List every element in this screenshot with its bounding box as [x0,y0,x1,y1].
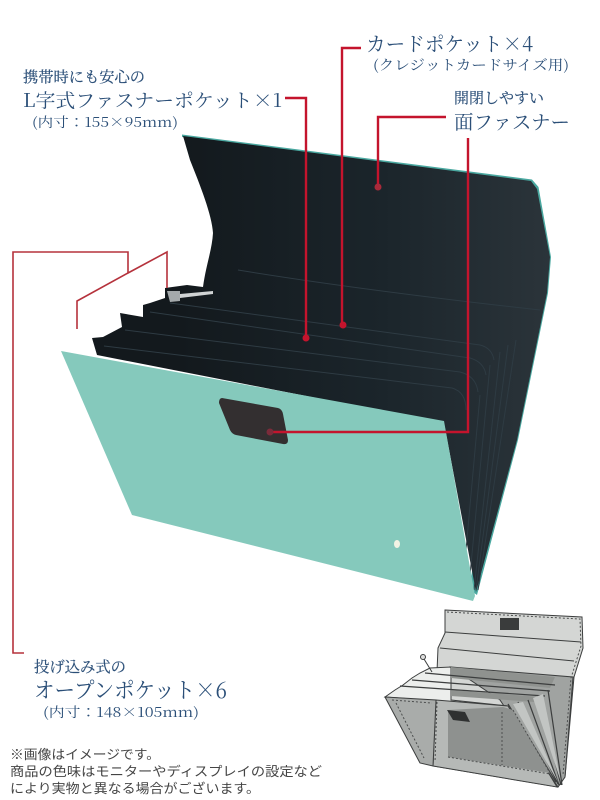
label: card pocket [366,28,569,75]
speck [394,540,400,548]
label: open pockets: オープンポケット×6 [34,674,227,705]
leader: L-shape fastener pocket [285,98,310,342]
label: open pockets: 投げ込み式の [34,656,126,677]
diagram pocket bands [451,667,555,702]
label: L-shape fastener pocket: L字式ファスナーポケット×1 [23,86,282,113]
note: image disclaimer: により実物と異なる場合がございます。 [10,778,260,797]
callout lines [13,48,468,653]
diagram rear grey panel [451,667,573,787]
label: L-shape fastener pocket: 携帯時にも安心の [23,66,145,87]
leader: card pocket [340,48,361,328]
icon: zipper pull [167,291,213,302]
note: image disclaimer: 商品の色味はモニターやディスプレイの設定など [10,761,322,780]
label: open pockets: (内寸：148×105mm) [43,701,199,721]
leader: surface fastener tab [266,138,468,436]
main product: open case [61,134,551,601]
diagram front flap [385,697,436,766]
label: L-shape fastener pocket: (内寸：155×95mm) [32,111,178,131]
label: card pocket: (クレジットカードサイズ用) [373,55,569,75]
diagram inner pocket [448,707,550,773]
diagram pleat shades [513,694,561,782]
leader: surface fastener flap [374,117,446,190]
diagram pleats [400,673,562,785]
fastener tab [219,398,288,444]
note: image disclaimer [10,744,322,797]
dark interior lining [92,136,550,592]
label: surface fastener [454,87,570,135]
diagram front body [433,700,557,787]
diagram flap fold lines [440,632,581,661]
label: open pockets [34,656,227,721]
label: L-shape fastener pocket [23,66,282,131]
label: card pocket: カードポケット×4 [366,28,533,57]
diagram: case line drawing [385,610,583,787]
note: image disclaimer: ※画像はイメージです。 [10,744,160,763]
lining folds and pocket seams [104,270,540,590]
diagram tab small [447,710,470,722]
diagram pocket tiers [385,667,508,706]
label: surface fastener: 面ファスナー [454,107,570,135]
front panel [61,351,475,601]
flap teal edge [182,134,551,595]
diagram stitched seams [392,612,581,775]
diagram zipper pull [420,654,432,672]
leader: open pockets [13,252,167,653]
diagram tab [500,618,519,630]
diagram flap [433,610,583,787]
label: surface fastener: 開閉しやすい [454,87,544,108]
